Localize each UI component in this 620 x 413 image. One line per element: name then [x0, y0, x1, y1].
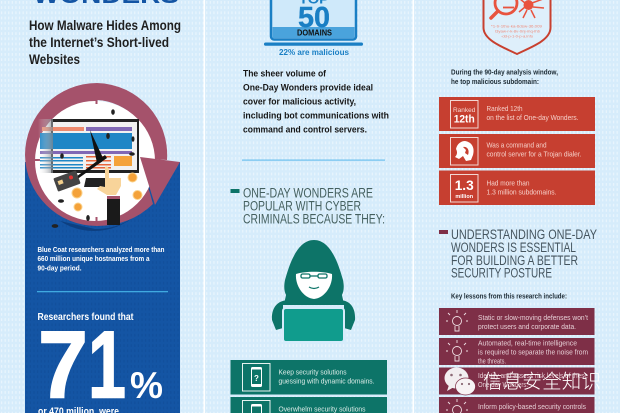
panel: trojan dialer: control server for a Trojan dialer.: [486, 150, 582, 158]
text: 22% are malicious: 22% are malicious: [279, 47, 349, 57]
panel: identify risks: [439, 368, 594, 394]
heading: one-day wonders are popular: ONE-DAY WONDERS ARE: [243, 185, 373, 200]
panel: ranked 12th: [439, 97, 595, 131]
monitor: [38, 119, 139, 187]
heading: understanding one-day wonders: FOR BUILDING A BETTER: [451, 253, 578, 268]
icon: shield with magnifier and spider: [484, 0, 550, 54]
panel: trojan dialer: [439, 134, 595, 168]
credit card: [53, 170, 81, 192]
panel: 1.3 million: 1.3: [455, 177, 474, 193]
icon: trojan helmet: [455, 141, 474, 161]
icon: top 50 laptop: 50: [298, 2, 330, 34]
panel: static defenses: Static or slow-moving defenses won’t: [478, 313, 588, 322]
text: during analysis window: During the 90-day analysis window,: [451, 68, 558, 76]
panel: blue statistics: [25, 83, 180, 413]
icon: shield with magnifier and spider: -dd-p-1-0-p-a.info: [501, 34, 534, 38]
text: during analysis window: he top malicious subdomain:: [451, 77, 539, 86]
panel: automated intelligence: the threats.: [478, 356, 506, 366]
panel: ranked 12th: 12th: [454, 114, 475, 126]
icon: top 50 laptop: DOMAINS: [297, 28, 332, 38]
bugs: [52, 109, 135, 228]
panel: keep guessing: guessing with dynamic domains.: [278, 376, 374, 386]
watermark: chat bubbles and caption: 信息安全知识: [483, 365, 601, 394]
icon: hooded hacker at laptop: [272, 240, 355, 342]
panel: automated intelligence: is required to separate the noise from: [478, 348, 588, 356]
text: sheer volume paragraph: cover for malicious activity,: [243, 96, 356, 106]
subtitle: Websites: [29, 51, 80, 67]
icon: light bulb: [446, 310, 468, 331]
text: sheer volume paragraph: command and control servers.: [243, 124, 367, 134]
icon: phone question: ?: [254, 374, 259, 383]
panel: 1.3 million: Had more than: [486, 178, 530, 188]
panel: policy-based controls: [439, 397, 594, 413]
stat: 71 percent: %: [130, 365, 163, 406]
text: key lessons: Key lessons from this research include:: [451, 292, 567, 300]
text: research intro: 660 million unique hostnames from a: [38, 254, 150, 263]
heading: understanding one-day wonders: SECURITY POSTURE: [451, 266, 552, 280]
panel: automated intelligence: Automated, real-time intelligence: [478, 338, 577, 348]
illustration: clock arrow around monitor: [25, 83, 180, 231]
stat: 71 percent: [38, 312, 163, 413]
panel: 1.3 million: million: [455, 194, 474, 200]
text: during analysis window: [451, 68, 558, 86]
panel: ranked 12th: Ranked: [453, 107, 476, 114]
panel: ranked 12th: Ranked 12th: [486, 104, 522, 113]
text: research intro: Blue Coat researchers analyzed more than: [38, 245, 164, 254]
panel: overwhelm: [230, 397, 387, 413]
panel: static defenses: protect users and corporate data.: [478, 322, 576, 331]
icon: light bulb: [446, 340, 468, 361]
icon: phone question: [242, 364, 270, 391]
panel: identify risks: Identify and assess risk levels of these: [478, 371, 588, 380]
panel: 1.3 million: [439, 170, 595, 205]
clock hands: [60, 130, 107, 190]
pointing hand: [97, 166, 121, 225]
text: sheer volume paragraph: The sheer volume of: [243, 68, 327, 78]
panel: identify risks: One-day Wonders.: [478, 380, 528, 389]
subtitle: the Internet’s Short-lived: [29, 34, 169, 50]
heading: understanding one-day wonders: WONDERS IS ESSENTIAL: [451, 240, 576, 255]
panel: trojan dialer: Was a command and: [486, 140, 546, 150]
heading: understanding one-day wonders: [439, 227, 597, 280]
coins: [72, 173, 142, 211]
subtitle: How Malware Hides Among: [29, 17, 181, 33]
panel: automated intelligence: [439, 338, 594, 366]
text: research intro: [38, 245, 164, 272]
icon: shield with magnifier and spider: l3yaw-r-k-8v-0nj-mq-lhb: [495, 28, 541, 34]
text: sheer volume paragraph: including bot communications with: [243, 110, 389, 120]
heading: one-day wonders are popular: POPULAR WITH CYBER: [243, 198, 361, 213]
text: sheer volume paragraph: One-Day Wonders provide ideal: [243, 82, 373, 92]
icon: chat bubbles: [444, 368, 476, 395]
text: sheer volume paragraph: [243, 68, 389, 134]
panel: ranked 12th: on the list of One-day Wonders.: [486, 113, 578, 122]
subtitle: [29, 17, 181, 67]
panel: keep guessing: [230, 360, 387, 394]
icon: shield with magnifier and spider: *1-tr-1thu-ka-6dsw-36.009: [491, 24, 543, 28]
heading: one-day wonders are popular: [230, 185, 385, 226]
icon: light bulb: [446, 399, 468, 413]
panel: 1.3 million: 1.3 million subdomains.: [486, 188, 556, 196]
text: research intro: 90-day period.: [38, 264, 82, 272]
panel: policy-based controls: Inform policy-based security controls: [478, 402, 586, 411]
text: researchers found that: Researchers found that: [38, 312, 134, 323]
panel: static defenses: [439, 308, 594, 335]
icon: top 50 laptop: [264, 0, 363, 46]
heading: one-day wonders are popular: CRIMINALS BECAUSE THEY:: [243, 211, 385, 226]
panel: keep guessing: Keep security solutions: [278, 368, 347, 376]
